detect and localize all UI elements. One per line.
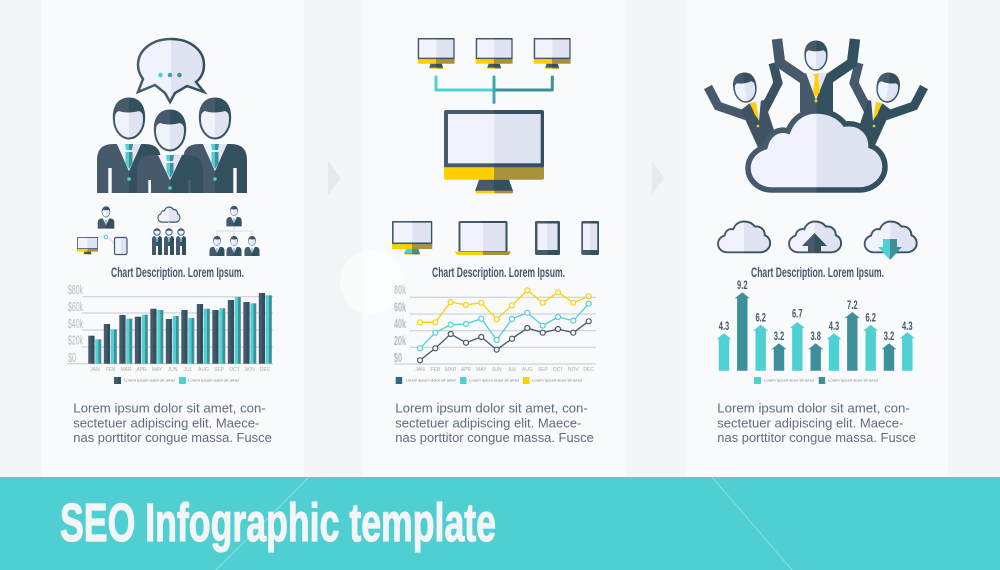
arrow bar chart: 4.3: [829, 319, 839, 333]
center person: [777, 39, 855, 112]
bar chart: monthly values: APR: [136, 367, 147, 373]
bar chart: monthly values: $60k: [68, 299, 83, 314]
icon: three monitors: [418, 38, 571, 69]
bar chart: monthly values: JUL: [184, 367, 193, 373]
legend: chart 2: Lorem ipsum dolor sit amet: [532, 378, 583, 382]
bar chart: monthly values: MAY: [152, 367, 163, 373]
icon: speech bubble: [138, 39, 204, 102]
line chart: three series: 20k: [394, 333, 406, 348]
text block: panel 2: Lorem ipsum dolor sit amet, con-: [395, 400, 588, 415]
panel: people: [41, 0, 304, 477]
arrow bar chart: 3.2: [774, 329, 784, 343]
heading: chart 2: Chart Description. Lorem Ipsum.: [432, 265, 565, 280]
arrow bar chart: 4.3: [719, 319, 729, 333]
text block: panel 3: [717, 400, 916, 445]
arrow bar chart: 7.2: [847, 298, 858, 312]
icon: cloud with team: [152, 207, 186, 255]
icon: network connector: [436, 77, 552, 102]
icon: three people on a cloud: [708, 39, 924, 152]
arrow: panel 2 to 3: [652, 161, 664, 195]
legend: chart 3: [754, 377, 879, 384]
bar chart: monthly values: OCT: [229, 367, 240, 373]
title: SEO Infographic template: [60, 493, 496, 553]
panel: cloud: [685, 0, 948, 477]
bar chart: monthly values: SEP: [214, 367, 225, 373]
line chart: three series: NOV: [568, 367, 579, 373]
heading: chart 3: Chart Description. Lorem Ipsum.: [751, 265, 884, 280]
line chart: three series: MAY: [476, 367, 487, 373]
bar chart: monthly values: $80k: [68, 282, 83, 297]
line chart: three series: JUN: [492, 367, 502, 373]
arrow bar chart: 3.2: [884, 329, 894, 343]
legend: chart 1: [114, 377, 240, 384]
icon: large monitor: [444, 110, 544, 193]
text block: panel 2: nas porttitor congue massa. Fusce: [395, 430, 594, 445]
icon: cloud upload: [789, 221, 841, 252]
arrow bar chart: 9.2: [737, 278, 748, 292]
bar chart: monthly values: AUG: [198, 367, 209, 373]
arrow bar chart: [716, 278, 915, 371]
text block: panel 1: sectetuer adipiscing elit. Maece-: [73, 415, 259, 430]
bar chart: monthly values: $0: [68, 350, 76, 365]
arrow bar chart: 6.7: [792, 307, 803, 321]
text block: panel 2: [395, 400, 594, 445]
line chart: three series: $0: [394, 350, 402, 365]
legend: chart 2: [396, 377, 583, 384]
line chart: three series: JUL: [508, 367, 517, 373]
line chart: three series: SEP: [538, 367, 548, 373]
line chart: three series: OCT: [553, 367, 563, 373]
bar chart: monthly values: JUN: [168, 367, 178, 373]
bar chart: monthly values: FEB: [106, 367, 116, 373]
bar chart: monthly values: MAR: [120, 367, 132, 373]
heading: chart 1: Chart Description. Lorem Ipsum.: [111, 265, 244, 280]
line chart: three series: FEB: [430, 367, 441, 373]
icon: team of three people: [97, 98, 247, 193]
legend: chart 3: Lorem ipsum dolor sit amet: [764, 378, 815, 382]
bar chart: monthly values: NOV: [245, 367, 256, 373]
icon: cloud: [718, 221, 770, 252]
legend: chart 2: Lorem ipsum dolor sit amet: [469, 378, 520, 382]
text block: panel 2: sectetuer adipiscing elit. Maece-: [395, 415, 581, 430]
arrow bar chart: 6.2: [755, 310, 766, 324]
bar chart: monthly values: $20k: [68, 332, 83, 348]
line chart: three series: JAN: [415, 367, 425, 373]
line chart: three series: APR: [461, 367, 472, 373]
icon: cloud download: [865, 221, 917, 260]
banner: [0, 477, 1000, 570]
legend: chart 2: Lorem ipsum dolor sit amet: [406, 378, 457, 382]
text block: panel 1: Lorem ipsum dolor sit amet, con-: [73, 400, 266, 415]
legend: chart 3: Lorem ipsum dolor sit amet: [828, 378, 879, 382]
icon: large cloud: [748, 111, 885, 190]
left person: [708, 63, 778, 152]
legend: chart 1: Lorem ipsum dolor sit amet: [124, 378, 176, 382]
legend: chart 1: Lorem ipsum dolor sit amet: [188, 378, 240, 382]
line chart: three series: [394, 282, 596, 373]
text block: panel 3: sectetuer adipiscing elit. Maece-: [717, 415, 903, 430]
line chart: three series: DEC: [583, 367, 594, 373]
bar chart: monthly values: DEC: [260, 367, 271, 373]
line chart: three series: 60k: [394, 300, 406, 315]
arrow bar chart: 4.3: [902, 319, 913, 333]
text block: panel 3: nas porttitor congue massa. Fusce: [717, 430, 916, 445]
text block: panel 3: Lorem ipsum dolor sit amet, con-: [717, 400, 910, 415]
arrow bar chart: 3.8: [810, 329, 821, 343]
line chart: three series: AUG: [522, 367, 533, 373]
line chart: three series: 80k: [394, 282, 406, 297]
arrow: panel 1 to 2: [328, 161, 341, 195]
line chart: three series: MAR: [445, 367, 457, 373]
line chart: three series: 40k: [394, 316, 406, 331]
text block: panel 1: [73, 400, 272, 445]
bar chart: monthly values: JAN: [90, 367, 100, 373]
icon: device row: [392, 221, 599, 255]
right person: [854, 63, 924, 152]
arrow bar chart: 6.2: [865, 310, 876, 324]
panel: devices: [363, 0, 626, 477]
bar chart: monthly values: [67, 282, 273, 373]
text block: panel 1: nas porttitor congue massa. Fusce: [73, 430, 272, 445]
bar chart: monthly values: $40k: [68, 316, 83, 331]
icon: org chart: [209, 206, 260, 256]
icon: person with devices: [77, 206, 127, 255]
